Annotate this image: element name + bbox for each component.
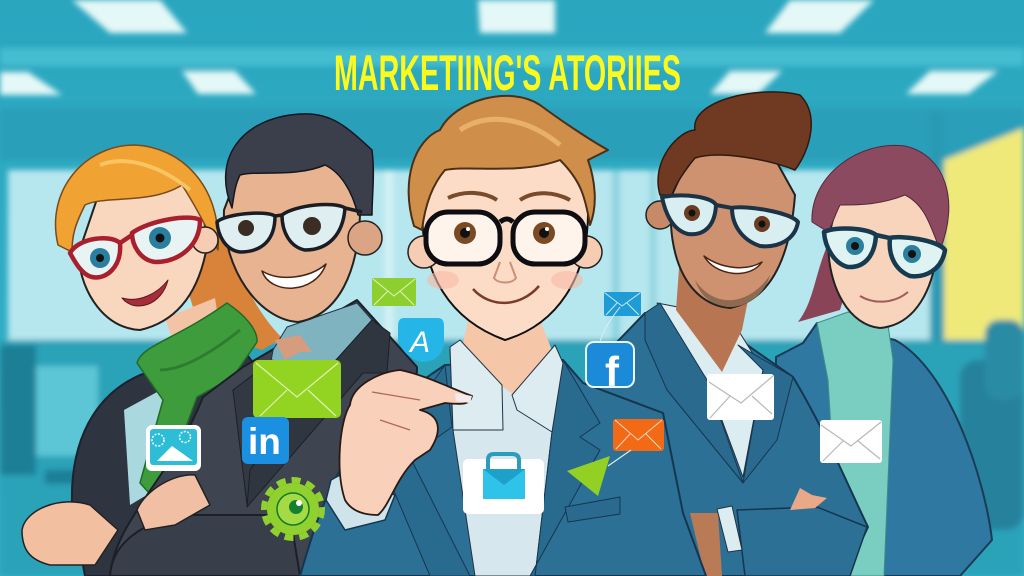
title: MARKETIING'S ATORIIES — [334, 45, 681, 101]
character: man on the right — [590, 92, 868, 576]
left woman's hands — [22, 502, 118, 565]
character: man on the left — [110, 114, 417, 576]
icon: LinkedIn: in — [248, 421, 281, 462]
icon: green envelope small — [372, 278, 416, 306]
icon: green envelope large — [253, 360, 341, 418]
icon: LinkedIn — [242, 417, 289, 464]
character: center person — [300, 96, 706, 576]
icon: shopping bag email card — [463, 454, 544, 514]
arm over body — [110, 515, 300, 576]
character: woman on the left — [22, 145, 282, 576]
icon: blue envelope small — [600, 292, 641, 342]
character: woman on the right — [775, 145, 992, 576]
icon: green gear — [264, 480, 322, 538]
icon: photo card — [146, 425, 201, 471]
icon: Facebook — [586, 342, 634, 395]
icon: orange envelope — [608, 419, 664, 466]
icon: white envelope — [707, 374, 774, 420]
icon: white envelope right — [820, 420, 882, 463]
icons floating over the group — [146, 278, 882, 538]
pointing hand — [340, 370, 472, 515]
cuff — [326, 475, 395, 530]
green scarf — [137, 303, 257, 494]
icon: app store — [398, 318, 444, 362]
icon: app store: A — [408, 326, 430, 359]
icon: Facebook: f — [605, 348, 620, 395]
jacket pocket — [565, 497, 620, 522]
icon: green arrow — [567, 456, 610, 496]
